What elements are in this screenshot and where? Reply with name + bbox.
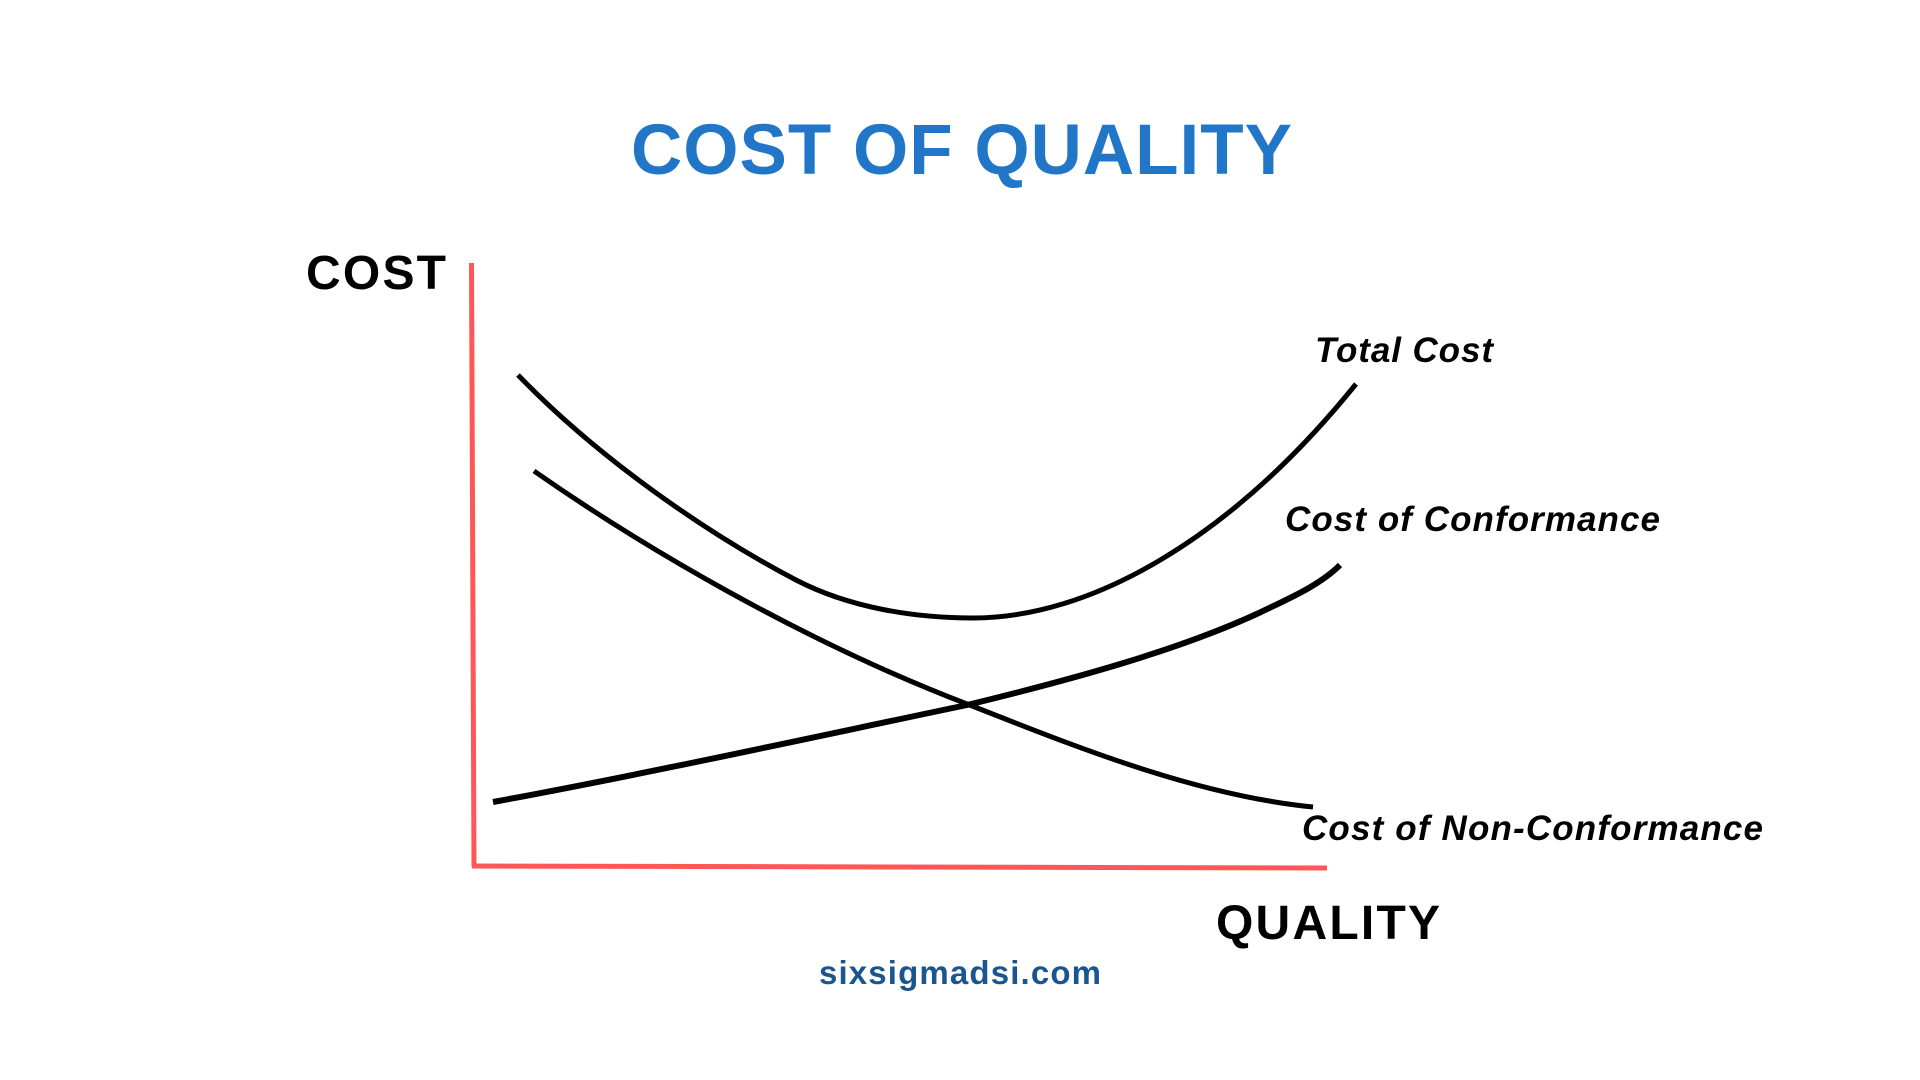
label: cost of conformance: Cost of Conformance	[1285, 500, 1660, 539]
curve: total cost	[518, 375, 1356, 618]
website credit: sixsigmadsi.com	[819, 954, 1101, 991]
curve: cost of non-conformance	[534, 471, 1313, 807]
x axis	[472, 866, 1327, 868]
title: COST OF QUALITY	[631, 111, 1292, 190]
label: cost of non-conformance: Cost of Non-Conformance	[1302, 809, 1763, 848]
label: total cost: Total Cost	[1315, 331, 1494, 370]
y axis	[472, 263, 474, 867]
curve: cost of conformance	[493, 565, 1340, 802]
y axis label: COST	[306, 247, 446, 300]
x axis label: QUALITY	[1216, 897, 1440, 950]
